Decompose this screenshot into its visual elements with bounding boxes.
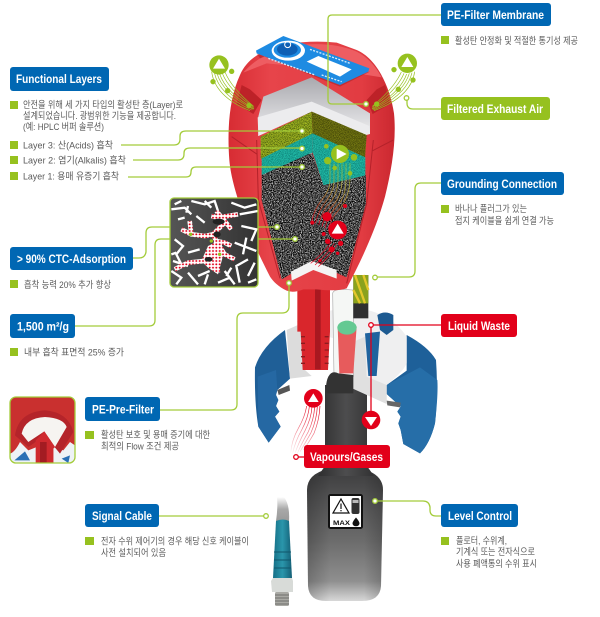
layer 1 item: Layer 1: 용매 유증기 흡착 xyxy=(23,170,119,182)
layer 3 item: Layer 3: 산(Acids) 흡착 xyxy=(23,140,113,152)
right exhaust icon xyxy=(372,54,417,111)
layer 2 alkalis xyxy=(262,133,313,176)
left exhaust icon xyxy=(209,55,254,111)
callout: Signal Cable: 사전 설치되어 있음 xyxy=(101,547,166,559)
red inner cylinder xyxy=(338,327,357,373)
icon: max level warning label xyxy=(328,494,363,529)
callout: PE-Filter Membrane: 활성탄 안정화 및 적절한 통기성 제공 xyxy=(455,35,578,47)
callout: PE-Filter Membrane xyxy=(328,3,578,106)
callout: surface area: 내부 흡착 표면적 25% 증가 xyxy=(24,346,124,358)
callout: Level Control: 플로터, 수위계, xyxy=(456,535,507,547)
dark connector xyxy=(326,372,353,393)
callout: surface area: 1,500 m²/g xyxy=(17,320,69,334)
waste bottle xyxy=(307,385,383,601)
callout: PE-Pre-Filter: 활성탄 보호 및 용매 증기에 대한 xyxy=(101,429,210,441)
panel: Functional Layers: Functional Layers xyxy=(16,72,102,86)
layer 2 item xyxy=(10,146,304,166)
panel: Functional Layers: 설계되었습니다. 광범위한 기능을 제공합니다. xyxy=(23,110,176,122)
green adsorption icon xyxy=(324,144,357,176)
callout: Level Control: Level Control xyxy=(448,509,512,523)
panel: Functional Layers: (예: HPLC 버퍼 솔루션) xyxy=(23,122,104,133)
glass tube xyxy=(333,289,353,377)
callout: PE-Pre-Filter: 최적의 Flow 조건 제공 xyxy=(101,440,179,452)
callout: PE-Pre-Filter xyxy=(85,281,291,452)
callout: Level Control: 기계식 또는 전자식으로 xyxy=(456,546,535,558)
callout: CTC adsorption: 흡착 능력 20% 추가 향상 xyxy=(24,279,111,291)
callout: Filtered Exhaust Air xyxy=(404,96,550,120)
callout: surface area xyxy=(10,237,297,358)
callout: PE-Pre-Filter: PE-Pre-Filter xyxy=(92,402,154,416)
layer 3 acids xyxy=(261,112,313,159)
layer 2 item: Layer 2: 염기(Alkalis) 흡착 xyxy=(23,154,126,166)
icon: max level warning label: MAX xyxy=(333,520,351,527)
pre-filter inset xyxy=(10,397,75,463)
white bottom filter xyxy=(291,261,337,281)
callout: Vapours/Gases xyxy=(291,389,390,468)
callout: PE-Filter Membrane: PE-Filter Membrane xyxy=(447,8,544,22)
callout: Signal Cable: Signal Cable xyxy=(92,509,152,523)
callout: Filtered Exhaust Air: Filtered Exhaust Air xyxy=(447,102,543,116)
red vapour icon xyxy=(310,204,347,262)
callout: Vapours/Gases: Vapours/Gases xyxy=(310,450,383,464)
red canister xyxy=(209,42,417,292)
vapour flow stripes xyxy=(311,163,350,267)
blue fittings xyxy=(377,312,393,335)
callout: CTC adsorption xyxy=(10,225,279,291)
callout: Level Control xyxy=(373,499,537,570)
callout: Grounding Connection: 바나나 플러그가 있는 xyxy=(455,203,527,215)
canister shell xyxy=(229,42,395,292)
callout: Liquid Waste: Liquid Waste xyxy=(448,319,510,333)
red drain tube xyxy=(297,276,330,370)
white top filter xyxy=(258,77,370,136)
layer 3 item xyxy=(10,129,304,152)
panel: Functional Layers xyxy=(10,67,304,182)
blue lock ring right xyxy=(387,335,437,453)
callout: Grounding Connection xyxy=(373,172,564,280)
safety cap cross-section xyxy=(255,275,438,453)
callout: Signal Cable: 전자 수위 제어기의 경우 해당 신호 케이블이 xyxy=(101,536,249,548)
blue lock ring left xyxy=(255,330,290,443)
panel: Functional Layers: 안전을 위해 세 가지 타입의 활성탄 층(Layer)로 xyxy=(23,99,183,111)
callout: CTC adsorption: > 90% CTC-Adsorption xyxy=(17,252,126,266)
layer 1 solvent vapours xyxy=(262,153,366,279)
callout: Signal Cable xyxy=(85,504,268,559)
layer 1 item xyxy=(10,165,304,182)
magnified carbon structure xyxy=(170,198,258,287)
callout: Level Control: 사용 폐액통의 수위 표시 xyxy=(456,558,537,570)
seal details xyxy=(277,385,290,395)
callout: Grounding Connection: Grounding Connection xyxy=(447,177,557,191)
blue top label xyxy=(256,36,370,87)
callout: Grounding Connection: 접지 케이블을 쉽게 연결 가능 xyxy=(455,215,554,227)
white cap body xyxy=(297,308,407,404)
callout: Liquid Waste xyxy=(362,314,517,429)
grounding cable xyxy=(353,275,368,318)
signal cable connector xyxy=(271,497,293,606)
